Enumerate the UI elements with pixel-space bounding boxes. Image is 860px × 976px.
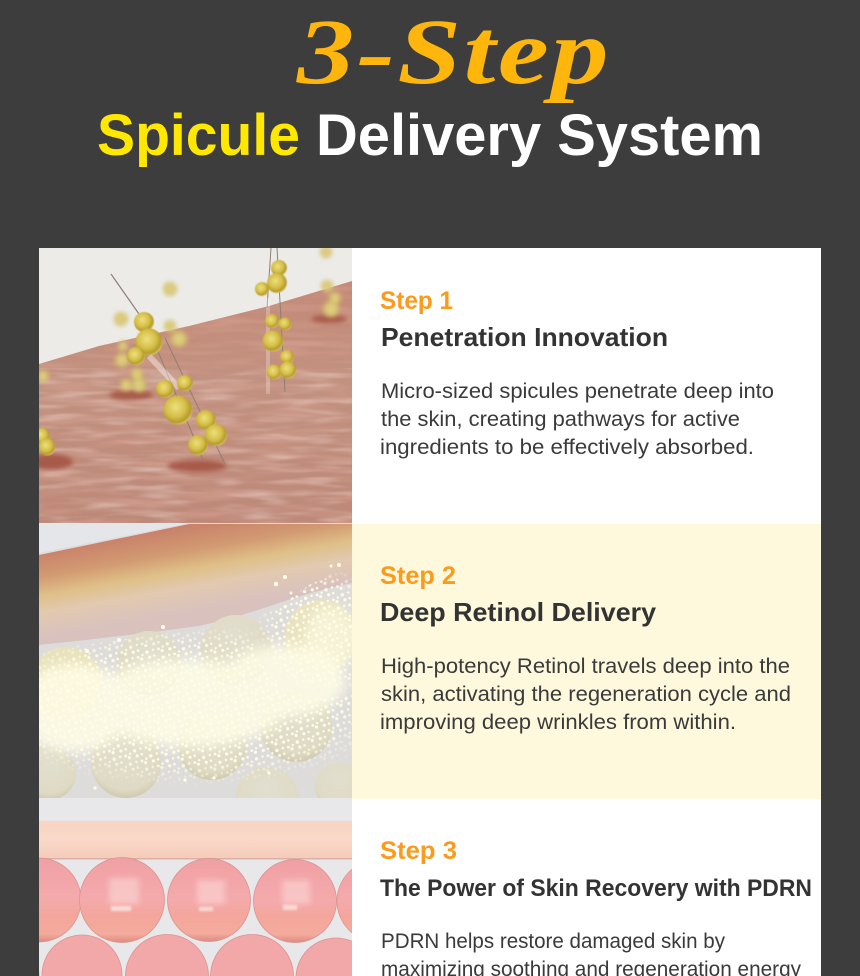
gold spheres [34, 260, 296, 456]
image: spicules penetrating skin [29, 246, 352, 524]
step heading: Deep Retinol Delivery [380, 597, 657, 627]
step description: Micro-sized spicules penetrate deep into [381, 379, 774, 403]
panel: step 1 [29, 246, 821, 524]
skin dimples [29, 315, 347, 472]
step heading: The Power of Skin Recovery with PDRN [380, 875, 812, 902]
step description [380, 654, 791, 734]
step description: ingredients to be effectively absorbed. [380, 435, 754, 459]
step heading: Penetration Innovation [381, 322, 668, 352]
step description: the skin, creating pathways for active [381, 407, 740, 431]
main needle [111, 248, 285, 464]
panel: step 2 [39, 523, 821, 799]
image: retinol particles [39, 523, 352, 798]
step label: Step 3 [380, 837, 457, 865]
subtitle: Spicule Delivery System: Spicule [97, 103, 300, 168]
particle cloud [16, 606, 357, 752]
text: step 1 [380, 287, 774, 459]
step label: Step 1 [380, 287, 453, 315]
image: PDRN pink spheres [39, 798, 352, 976]
highlights [109, 878, 310, 904]
top row spheres [39, 857, 352, 943]
text background: step 3 [352, 799, 821, 976]
text: step 3 [380, 837, 812, 976]
step description [381, 929, 801, 976]
text: step 2 [380, 562, 791, 734]
subtitle: Spicule Delivery System [97, 103, 763, 168]
step label: Step 2 [380, 562, 456, 590]
blurred background spicules [37, 246, 341, 392]
step description: High-potency Retinol travels deep into the [381, 654, 790, 678]
text background: step 1 [352, 248, 821, 524]
text background: step 2 [352, 524, 821, 799]
step description: improving deep wrinkles from within. [380, 710, 736, 734]
title: 3-Step: 3-Step [296, 1, 611, 104]
step description: skin, activating the regeneration cycle and [381, 682, 791, 706]
step description: PDRN helps restore damaged skin by [381, 929, 725, 953]
panel: step 3 [0, 798, 821, 976]
step description [380, 379, 774, 459]
subtitle: Spicule Delivery System: Delivery System [316, 103, 763, 168]
pearls [39, 600, 352, 798]
bottom row spheres [39, 934, 352, 976]
